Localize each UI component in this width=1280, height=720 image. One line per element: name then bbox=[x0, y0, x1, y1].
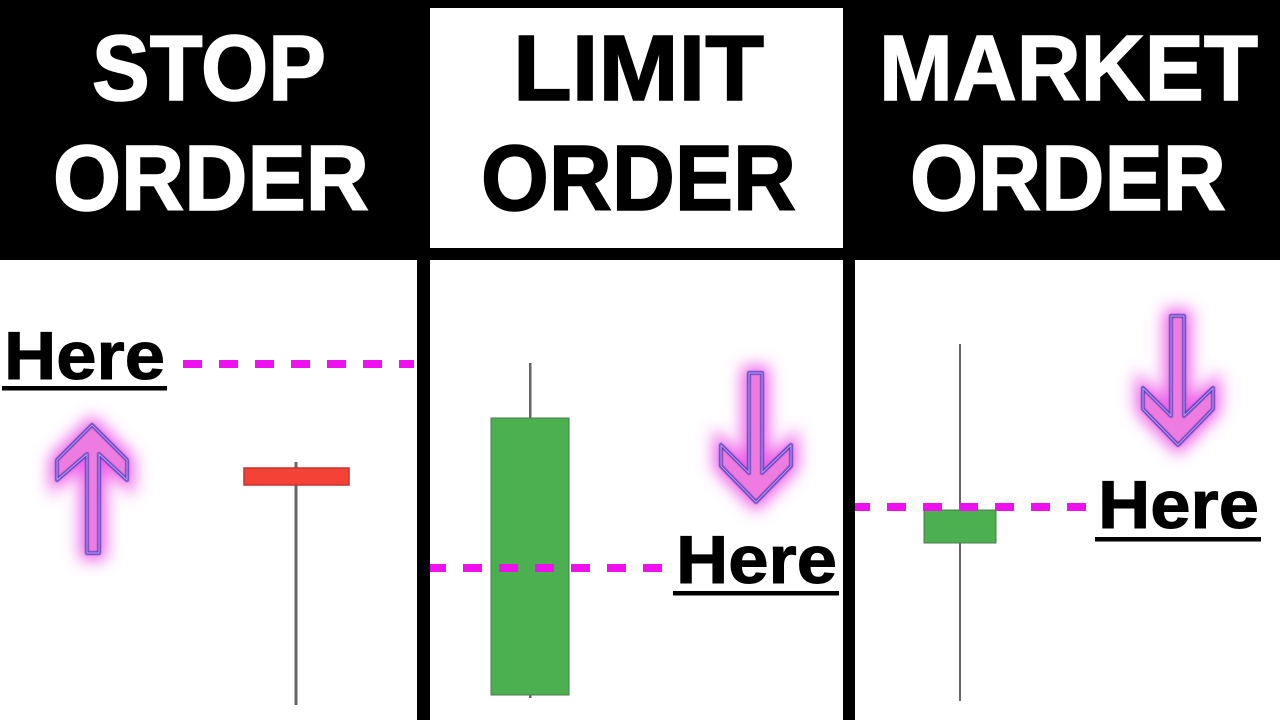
label: here (market): Here bbox=[1098, 467, 1259, 543]
divider: stop and limit panels bbox=[417, 260, 430, 720]
heading: market order: ORDER bbox=[910, 126, 1226, 230]
dashed level line (limit) bbox=[430, 564, 662, 572]
candlestick: small green bbox=[924, 344, 996, 701]
icon: neon up arrow bbox=[57, 425, 127, 553]
heading: stop order: ORDER bbox=[53, 126, 369, 230]
dashed level line (stop) bbox=[183, 360, 414, 368]
icon: neon down arrow (limit) bbox=[721, 373, 791, 502]
dashed level line (market) bbox=[855, 503, 1086, 511]
panel: stop order chart bbox=[2, 318, 414, 705]
candlestick: red bbox=[244, 462, 349, 705]
label: here (limit): Here bbox=[676, 522, 837, 598]
candlestick: large green bbox=[491, 363, 569, 698]
icon: neon down arrow (market) bbox=[1143, 316, 1213, 445]
heading: stop order bbox=[53, 16, 369, 230]
panel: limit order heading bbox=[430, 8, 843, 248]
divider: limit and market panels bbox=[843, 260, 855, 720]
heading: market order bbox=[879, 16, 1258, 230]
panel: market order chart bbox=[855, 316, 1261, 701]
panel: limit order heading: ORDER bbox=[481, 126, 796, 230]
panel: limit order heading: LIMIT bbox=[513, 16, 764, 120]
heading: stop order: STOP bbox=[92, 16, 326, 120]
header band bbox=[0, 0, 1280, 260]
heading: market order: MARKET bbox=[879, 16, 1258, 120]
label: here (stop): Here bbox=[4, 318, 165, 394]
panel: limit order chart bbox=[430, 363, 839, 698]
